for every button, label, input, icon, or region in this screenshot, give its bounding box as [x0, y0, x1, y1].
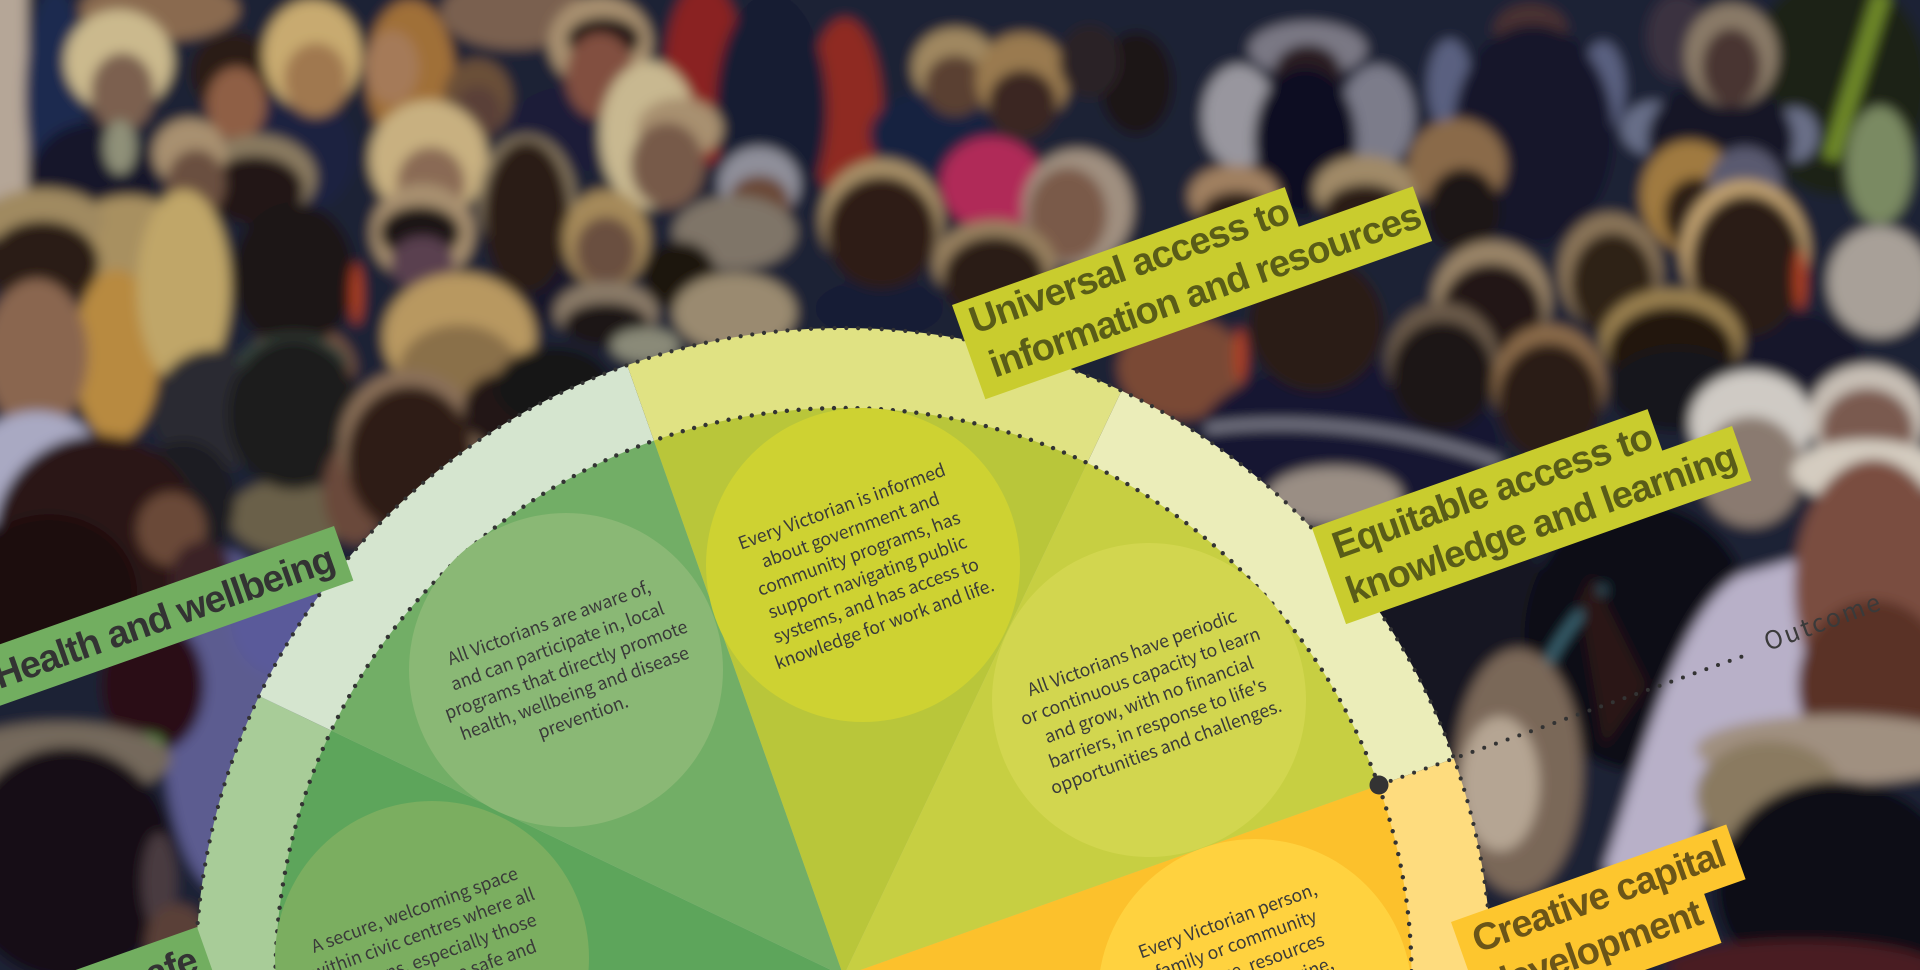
circle: health programs: All Victorians are aware of, [444, 574, 654, 671]
label: universal access: information and resources [984, 195, 1426, 386]
circle: health programs: health, wellbeing and disease [456, 640, 692, 746]
circle: informed Victorians: about government and [757, 486, 943, 574]
circle: capacity to learn [992, 543, 1306, 857]
label: equitable access [1312, 384, 1751, 624]
circle: informed Victorians: systems, and has access to [770, 551, 982, 649]
circle: capacity to learn: opportunities and challenges. [1047, 693, 1285, 800]
circle: informed Victorians: knowledge for work and life. [771, 572, 998, 675]
circle: creative capital [1098, 839, 1412, 970]
inner wheel: outcome wedges [278, 408, 1412, 970]
outcome label: Outcome [1758, 582, 1887, 659]
circle: capacity to learn: All Victorians have periodic [1024, 603, 1240, 702]
outcome pointer line [1379, 653, 1752, 785]
circle: health programs [409, 513, 723, 827]
outer ring: five outcome domains [197, 328, 1488, 970]
pointer node [1370, 776, 1388, 794]
circle: informed Victorians: support navigating public [764, 529, 970, 624]
circle: health programs: and can participate in, local [447, 596, 668, 696]
outer dotted boundary [196, 328, 1492, 970]
label: equitable access: knowledge and learning [1341, 436, 1742, 613]
circle: informed Victorians [706, 408, 1020, 722]
circle: capacity to learn: barriers, in response to life's [1045, 672, 1270, 774]
label: universal access: Universal access to [964, 191, 1295, 342]
label: safe [0, 927, 230, 970]
circle: capacity to learn: or continuous capacity to learn [1017, 621, 1264, 731]
inner dotted boundary [276, 408, 1412, 970]
label: universal access [952, 147, 1432, 399]
circle: informed Victorians: Every Victorian is informed [734, 457, 949, 555]
label: creative capital development: Creative capital [1467, 833, 1731, 961]
label: equitable access: Equitable access to [1327, 416, 1657, 568]
circle: health programs: programs that directly promote [441, 614, 691, 725]
circle: health programs: prevention. [534, 689, 632, 744]
circle: informed Victorians: community programs, has [754, 505, 964, 602]
circle: creative capital: Every Victorian person, [1135, 876, 1320, 964]
circle: capacity to learn: and grow, with no financial [1041, 650, 1257, 749]
circle: safe civic space [275, 801, 589, 970]
circle: safe civic space: A secure, welcoming space [308, 861, 521, 959]
